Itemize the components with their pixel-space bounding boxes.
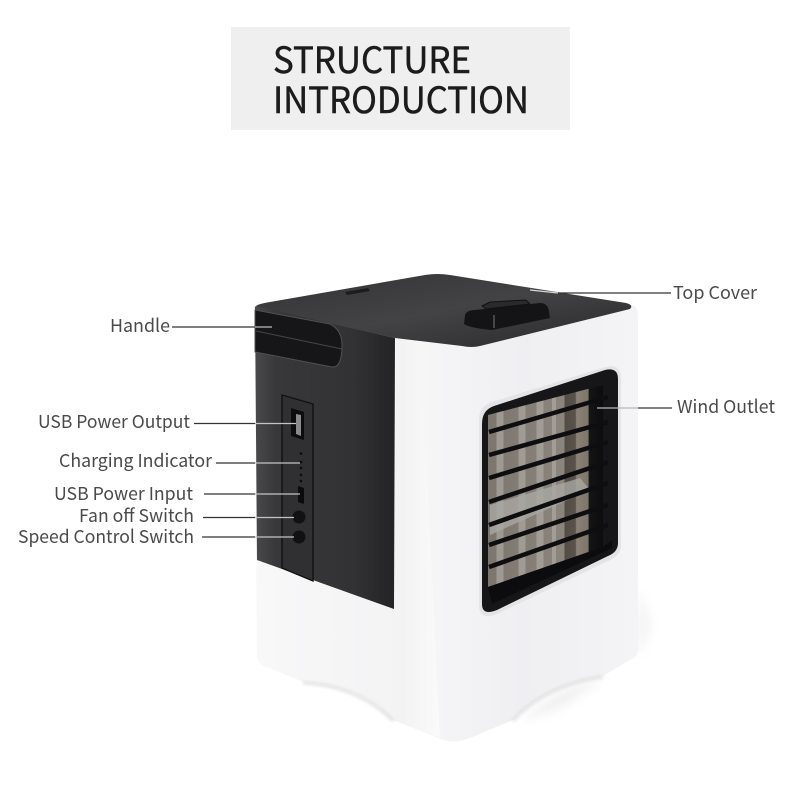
top button [464, 300, 550, 330]
top cover highlight edge [530, 290, 558, 293]
notch shading [303, 677, 603, 721]
charging indicator dots [300, 452, 302, 482]
label: USB Power Output: USB Power Output [38, 408, 190, 434]
white body [255, 305, 638, 742]
control strip [282, 395, 313, 581]
bottom dark band [488, 540, 612, 604]
grill interior [488, 385, 603, 587]
central grey patch [490, 478, 590, 535]
title panel [231, 27, 570, 130]
product: air cooler [255, 274, 652, 742]
fan off switch [292, 510, 306, 524]
wind outlet [479, 366, 621, 616]
louvers [489, 397, 608, 567]
title text: STRUCTURE [273, 32, 471, 84]
label: Top Cover: Top Cover [673, 279, 758, 305]
vertical slats [500, 380, 554, 600]
black side panel [255, 306, 395, 609]
label: Fan off Switch: Fan off Switch [79, 502, 194, 528]
black top cover [256, 274, 631, 347]
outlet recess [479, 366, 621, 616]
label: Handle: Handle [110, 312, 170, 338]
USB input port [298, 486, 304, 504]
top rear tab [345, 288, 370, 295]
outlet frame [482, 369, 618, 612]
white left lower face [257, 330, 440, 738]
USB output port [291, 408, 304, 440]
handle [255, 310, 342, 367]
floor shadow [520, 585, 652, 722]
label: Charging Indicator: Charging Indicator [59, 447, 213, 473]
title text: INTRODUCTION [273, 72, 529, 124]
title text [273, 32, 529, 124]
label: Wind Outlet: Wind Outlet [677, 393, 775, 419]
speed control switch [292, 530, 306, 544]
label: USB Power Input: USB Power Input [54, 480, 193, 506]
label: Speed Control Switch: Speed Control Switch [18, 523, 194, 549]
